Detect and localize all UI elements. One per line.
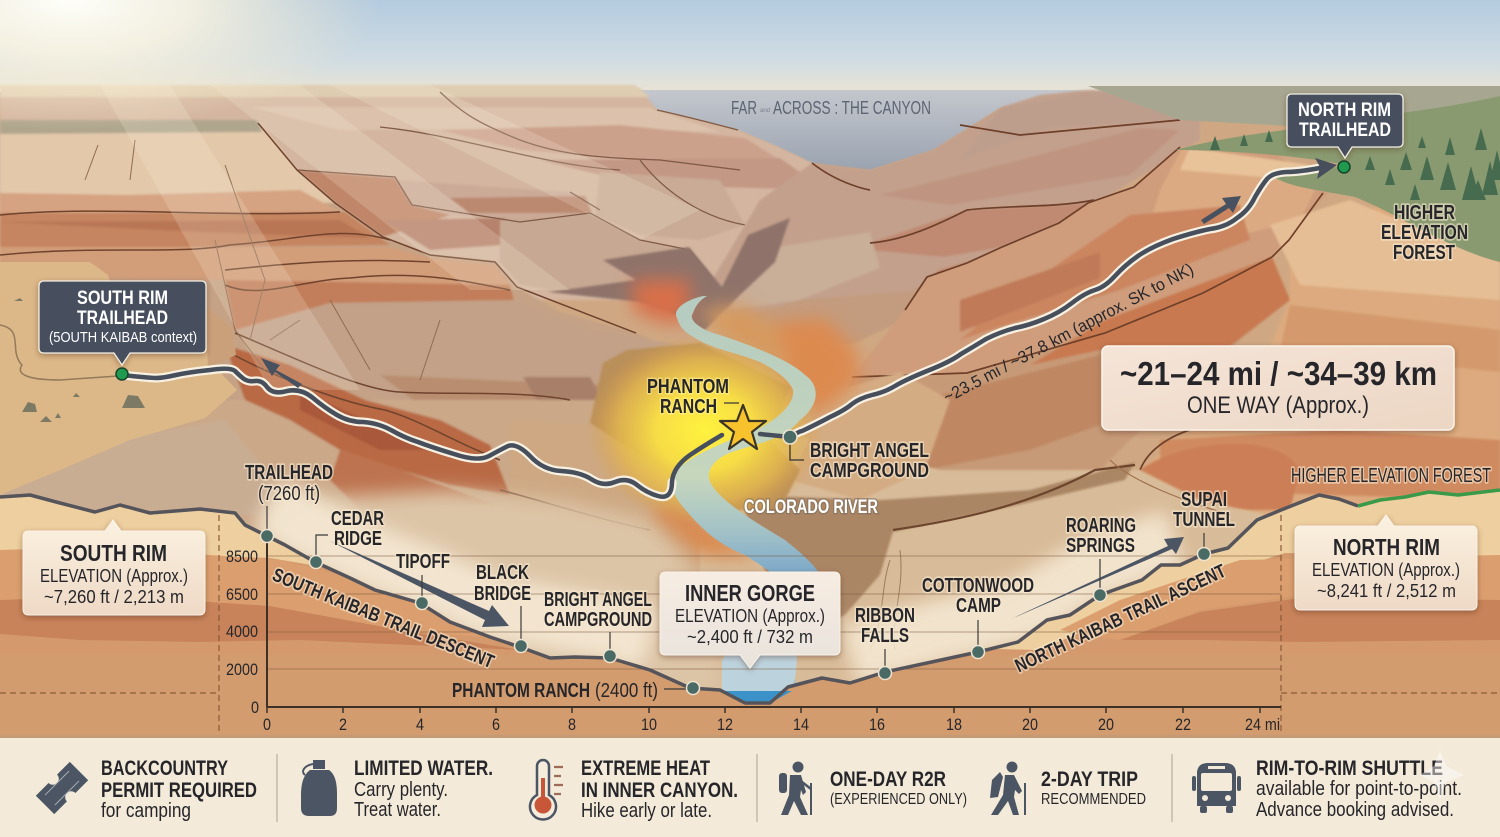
- axis labels: 2000: [226, 660, 258, 679]
- heat item: [530, 757, 738, 822]
- far canyon label: FAR: [731, 98, 757, 118]
- permit item: [36, 757, 257, 822]
- higher elevation forest label: [1381, 202, 1468, 264]
- north trail arrowhead: [1315, 158, 1337, 179]
- axis labels: 16: [869, 715, 885, 734]
- callout: North Rim elevation: NORTH RIM: [1333, 534, 1440, 560]
- far canyon label: and: [760, 108, 770, 114]
- water item: Treat water.: [354, 799, 441, 821]
- icon: ticket: [36, 762, 88, 814]
- label: Bright Angel Campground: [810, 440, 929, 482]
- forest plateau: [1088, 86, 1500, 262]
- label: Bright Angel Campground: BRIGHT ANGEL: [810, 440, 929, 462]
- lower left slope: [267, 490, 720, 700]
- far left wall strata: [0, 85, 860, 300]
- profile waypoint labels: TRAILHEAD: [245, 462, 333, 484]
- profile waypoint labels: (7260 ft): [258, 483, 320, 505]
- axis labels: 18: [946, 715, 962, 734]
- orange canyon heat: [633, 280, 860, 560]
- shuttle item: available for point-to-point.: [1256, 778, 1462, 800]
- sun rays: [100, 85, 700, 390]
- axis labels: 2: [339, 715, 347, 734]
- trail name: south kaibab descent: SOUTH KAIBAB TRAIL DESCENT: [269, 565, 497, 673]
- left massif ledge lines: [0, 123, 650, 530]
- higher elevation forest label: FOREST: [1393, 242, 1455, 264]
- profile waypoint leader lines: [267, 506, 1204, 689]
- river pool at canyon bottom: [722, 620, 797, 703]
- callout: Inner Gorge elevation: [660, 572, 840, 668]
- ascent arrow: [1011, 537, 1184, 619]
- profile waypoint labels: BLACK: [476, 562, 529, 584]
- label: Bright Angel Campground: CAMPGROUND: [810, 460, 929, 482]
- veil over profile: [267, 505, 1175, 655]
- profile waypoint labels: RIDGE: [334, 528, 382, 550]
- axis labels: [226, 547, 1280, 734]
- axis labels: 0: [263, 715, 271, 734]
- lower right slope lines: [870, 460, 1230, 650]
- axis labels: 20: [1022, 715, 1038, 734]
- callout: Inner Gorge elevation: ELEVATION (Approx.): [675, 606, 825, 626]
- south trail: [122, 369, 722, 497]
- callout: North Rim Trailhead: TRAILHEAD: [1299, 120, 1391, 141]
- yellow glow around Phantom Ranch: [587, 335, 823, 525]
- two-day item: 2-DAY TRIP: [1041, 768, 1138, 791]
- left near massif strata: [0, 120, 700, 530]
- axis labels: 4: [416, 715, 424, 734]
- callout: South Rim Trailhead: TRAILHEAD: [77, 308, 168, 329]
- marker: Bright Angel Campground: [783, 430, 804, 460]
- higher elevation forest label: ELEVATION: [1381, 222, 1468, 244]
- callout: North Rim elevation: [1295, 515, 1477, 610]
- water item: LIMITED WATER.: [354, 757, 493, 780]
- one-day item: [779, 762, 967, 815]
- axis labels: 24 mi: [1245, 715, 1280, 734]
- profile waypoint labels: (2400 ft): [595, 680, 658, 702]
- axis labels: 12: [717, 715, 733, 734]
- shuttle item: [1192, 757, 1462, 821]
- trail name: north kaibab ascent: NORTH KAIBAB TRAIL ASCENT: [1012, 561, 1230, 677]
- profile waypoint labels: [245, 462, 1491, 702]
- heat item: EXTREME HEAT: [581, 757, 710, 780]
- profile waypoint labels: COTTONWOOD: [922, 575, 1034, 597]
- icon: hiker with backpack: [990, 762, 1025, 815]
- profile waypoint labels: BRIGHT ANGEL: [544, 589, 652, 611]
- callout: North Rim Trailhead: [1287, 94, 1403, 173]
- footer panel: [0, 735, 1500, 837]
- profile waypoint labels: CAMP: [956, 595, 1001, 617]
- axis labels: 6500: [226, 585, 258, 604]
- profile waypoint labels: SPRINGS: [1066, 535, 1135, 557]
- axis labels: 8: [568, 715, 576, 734]
- profile waypoint labels: FALLS: [861, 625, 909, 647]
- Colorado River: [672, 296, 825, 700]
- sky: [0, 0, 1500, 100]
- elevation profile line: [0, 490, 1500, 703]
- profile waypoint labels: SUPAI: [1181, 489, 1227, 511]
- callout: South Rim elevation: SOUTH RIM: [60, 540, 167, 566]
- axis labels: 20: [1098, 715, 1114, 734]
- callout: South Rim Trailhead: SOUTH RIM: [77, 288, 168, 309]
- one-day item: (EXPERIENCED ONLY): [830, 791, 967, 808]
- callout: South Rim elevation: ~7,260 ft / 2,213 m: [44, 587, 184, 607]
- axis labels: 14: [793, 715, 809, 734]
- trail distance label: ~23.5 mi / ~37.8 km (approx. SK to NK): [940, 259, 1197, 407]
- profile axes and gridlines: [0, 515, 1500, 737]
- two-day item: [990, 762, 1146, 815]
- water item: Carry plenty.: [354, 779, 448, 801]
- profile waypoint labels: TIPOFF: [396, 551, 450, 573]
- far canyon wall: [634, 90, 1088, 170]
- profile waypoint labels: BRIDGE: [474, 583, 531, 605]
- two-day item: RECOMMENDED: [1041, 791, 1146, 808]
- profile waypoint labels: CEDAR: [331, 508, 384, 530]
- profile waypoint labels: PHANTOM RANCH: [452, 680, 590, 702]
- profile waypoint markers: [260, 530, 1210, 694]
- callout: North Rim Trailhead: NORTH RIM: [1298, 100, 1391, 121]
- shuttle item: RIM-TO-RIM SHUTTLE: [1256, 757, 1443, 780]
- elevation strata under profile: [0, 480, 1500, 740]
- heat item: IN INNER CANYON.: [581, 779, 738, 802]
- axis labels: 0: [251, 698, 259, 717]
- icon: bus: [1192, 763, 1241, 813]
- shuttle item: Advance booking advised.: [1256, 799, 1454, 821]
- profile waypoint labels: RIBBON: [855, 605, 915, 627]
- far canyon label: ACROSS : THE CANYON: [773, 98, 931, 118]
- callout: South Rim elevation: ELEVATION (Approx.): [40, 566, 188, 586]
- icon: canteen: [301, 760, 337, 816]
- axis labels: 6: [492, 715, 500, 734]
- permit item: BACKCOUNTRY: [101, 757, 228, 780]
- permit item: for camping: [101, 800, 191, 822]
- south rim plateau: [0, 262, 237, 495]
- icon: Phantom Ranch star: [720, 405, 766, 449]
- callout: one-way distance: ONE WAY (Approx.): [1187, 392, 1369, 419]
- north trail: [760, 167, 1325, 437]
- one-day item: ONE-DAY R2R: [830, 768, 946, 791]
- sun glow: [0, 0, 380, 130]
- label: Phantom Ranch: PHANTOM: [647, 376, 729, 398]
- axis labels: 22: [1175, 715, 1191, 734]
- Phantom Ranch rock block: [590, 343, 800, 510]
- icon: thermometer: [530, 760, 563, 820]
- label: Colorado River: COLORADO RIVER: [744, 497, 878, 518]
- profile waypoint labels: CAMPGROUND: [544, 609, 652, 631]
- lower right slope: [700, 372, 1290, 737]
- descent arrow: [330, 541, 509, 627]
- right lit cliff strata: [820, 147, 1500, 520]
- far canyon label: [731, 98, 931, 118]
- profile waypoint labels: ROARING: [1066, 515, 1136, 537]
- label: Phantom Ranch: [647, 376, 739, 418]
- axis labels: 4000: [226, 622, 258, 641]
- right cliff ridge lines: [812, 120, 1323, 470]
- higher elevation forest label: HIGHER: [1394, 202, 1455, 224]
- right mid wall strata: [700, 90, 1200, 345]
- callout: South Rim elevation: [23, 520, 205, 615]
- permit item: PERMIT REQUIRED: [101, 779, 257, 802]
- south trail direction arrow: [261, 358, 302, 388]
- label: Phantom Ranch: RANCH: [660, 396, 717, 418]
- callout: one-way distance: [1102, 346, 1454, 430]
- center gully: [548, 218, 790, 330]
- callout: North Rim elevation: ~8,241 ft / 2,512 m: [1317, 581, 1456, 601]
- callout: South Rim Trailhead: [39, 281, 206, 380]
- callout: North Rim elevation: ELEVATION (Approx.): [1312, 560, 1460, 580]
- far left ledge lines: [297, 92, 745, 290]
- callout: Inner Gorge elevation: INNER GORGE: [685, 580, 815, 606]
- icon: hiker with pole: [779, 762, 811, 815]
- heat item: Hike early or late.: [581, 800, 712, 822]
- north trail direction arrow: [1201, 196, 1241, 224]
- water item: [301, 757, 493, 821]
- callout: South Rim Trailhead: (5OUTH KAIBAB context): [49, 329, 197, 346]
- profile waypoint labels: TUNNEL: [1173, 509, 1235, 531]
- axis labels: 8500: [226, 547, 258, 566]
- callout: one-way distance: ~21–24 mi / ~34–39 km: [1120, 355, 1437, 392]
- axis labels: 10: [641, 715, 657, 734]
- callout: Inner Gorge elevation: ~2,400 ft / 732 m: [687, 627, 813, 647]
